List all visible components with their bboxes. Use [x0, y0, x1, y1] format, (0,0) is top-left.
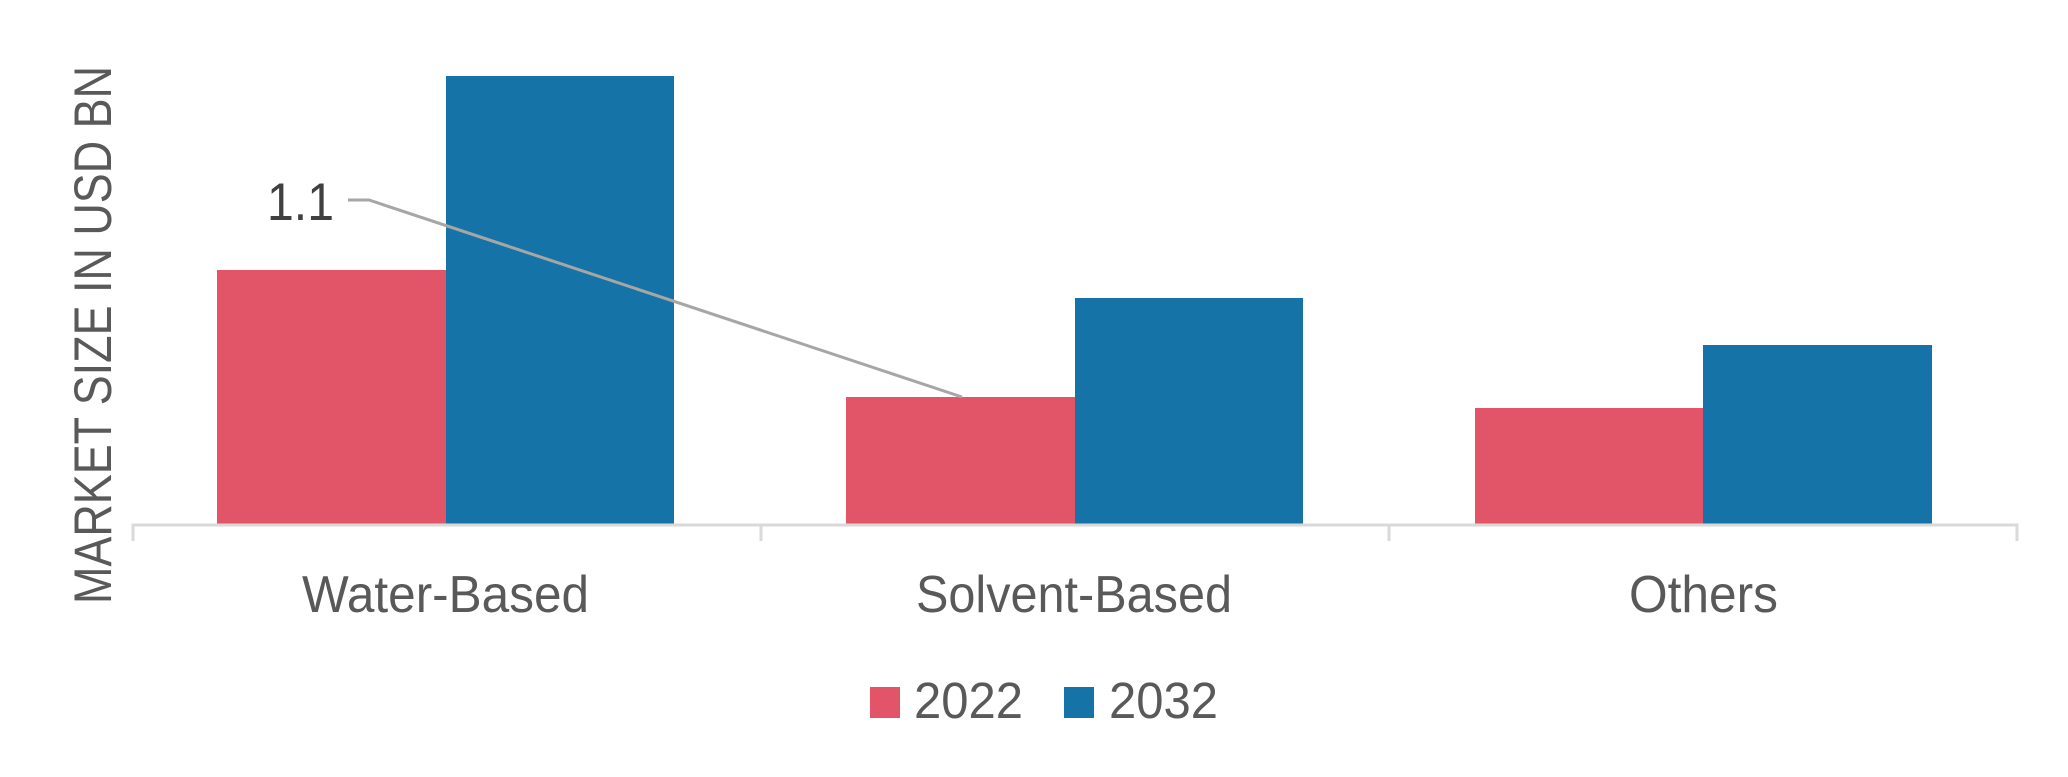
bar: Water-Based 2032 — [446, 76, 674, 524]
category label: Others: Others — [1629, 566, 1778, 624]
group: Others bars — [1475, 345, 1932, 524]
callout leader line — [348, 200, 962, 397]
group: Solvent-Based bars — [846, 298, 1303, 524]
bar: Solvent-Based 2032 — [1075, 298, 1303, 524]
legend — [870, 672, 1218, 729]
legend label: 2032: 2032 — [1109, 672, 1218, 729]
group: Water-Based bars — [217, 76, 674, 524]
legend swatch: 2022 — [870, 687, 900, 718]
bar: Solvent-Based 2022 — [846, 397, 1075, 524]
legend label: 2022: 2022 — [914, 672, 1023, 729]
callout value: 1.1: 1.1 — [267, 173, 334, 232]
category label: Water-Based: Water-Based — [302, 566, 589, 624]
bar: Others 2022 — [1475, 408, 1703, 524]
x-axis line and ticks — [133, 525, 2017, 541]
bar: Water-Based 2022 — [217, 270, 446, 524]
legend swatch: 2032 — [1064, 687, 1094, 718]
category label: Solvent-Based: Solvent-Based — [916, 566, 1232, 624]
bar: Others 2032 — [1703, 345, 1932, 524]
